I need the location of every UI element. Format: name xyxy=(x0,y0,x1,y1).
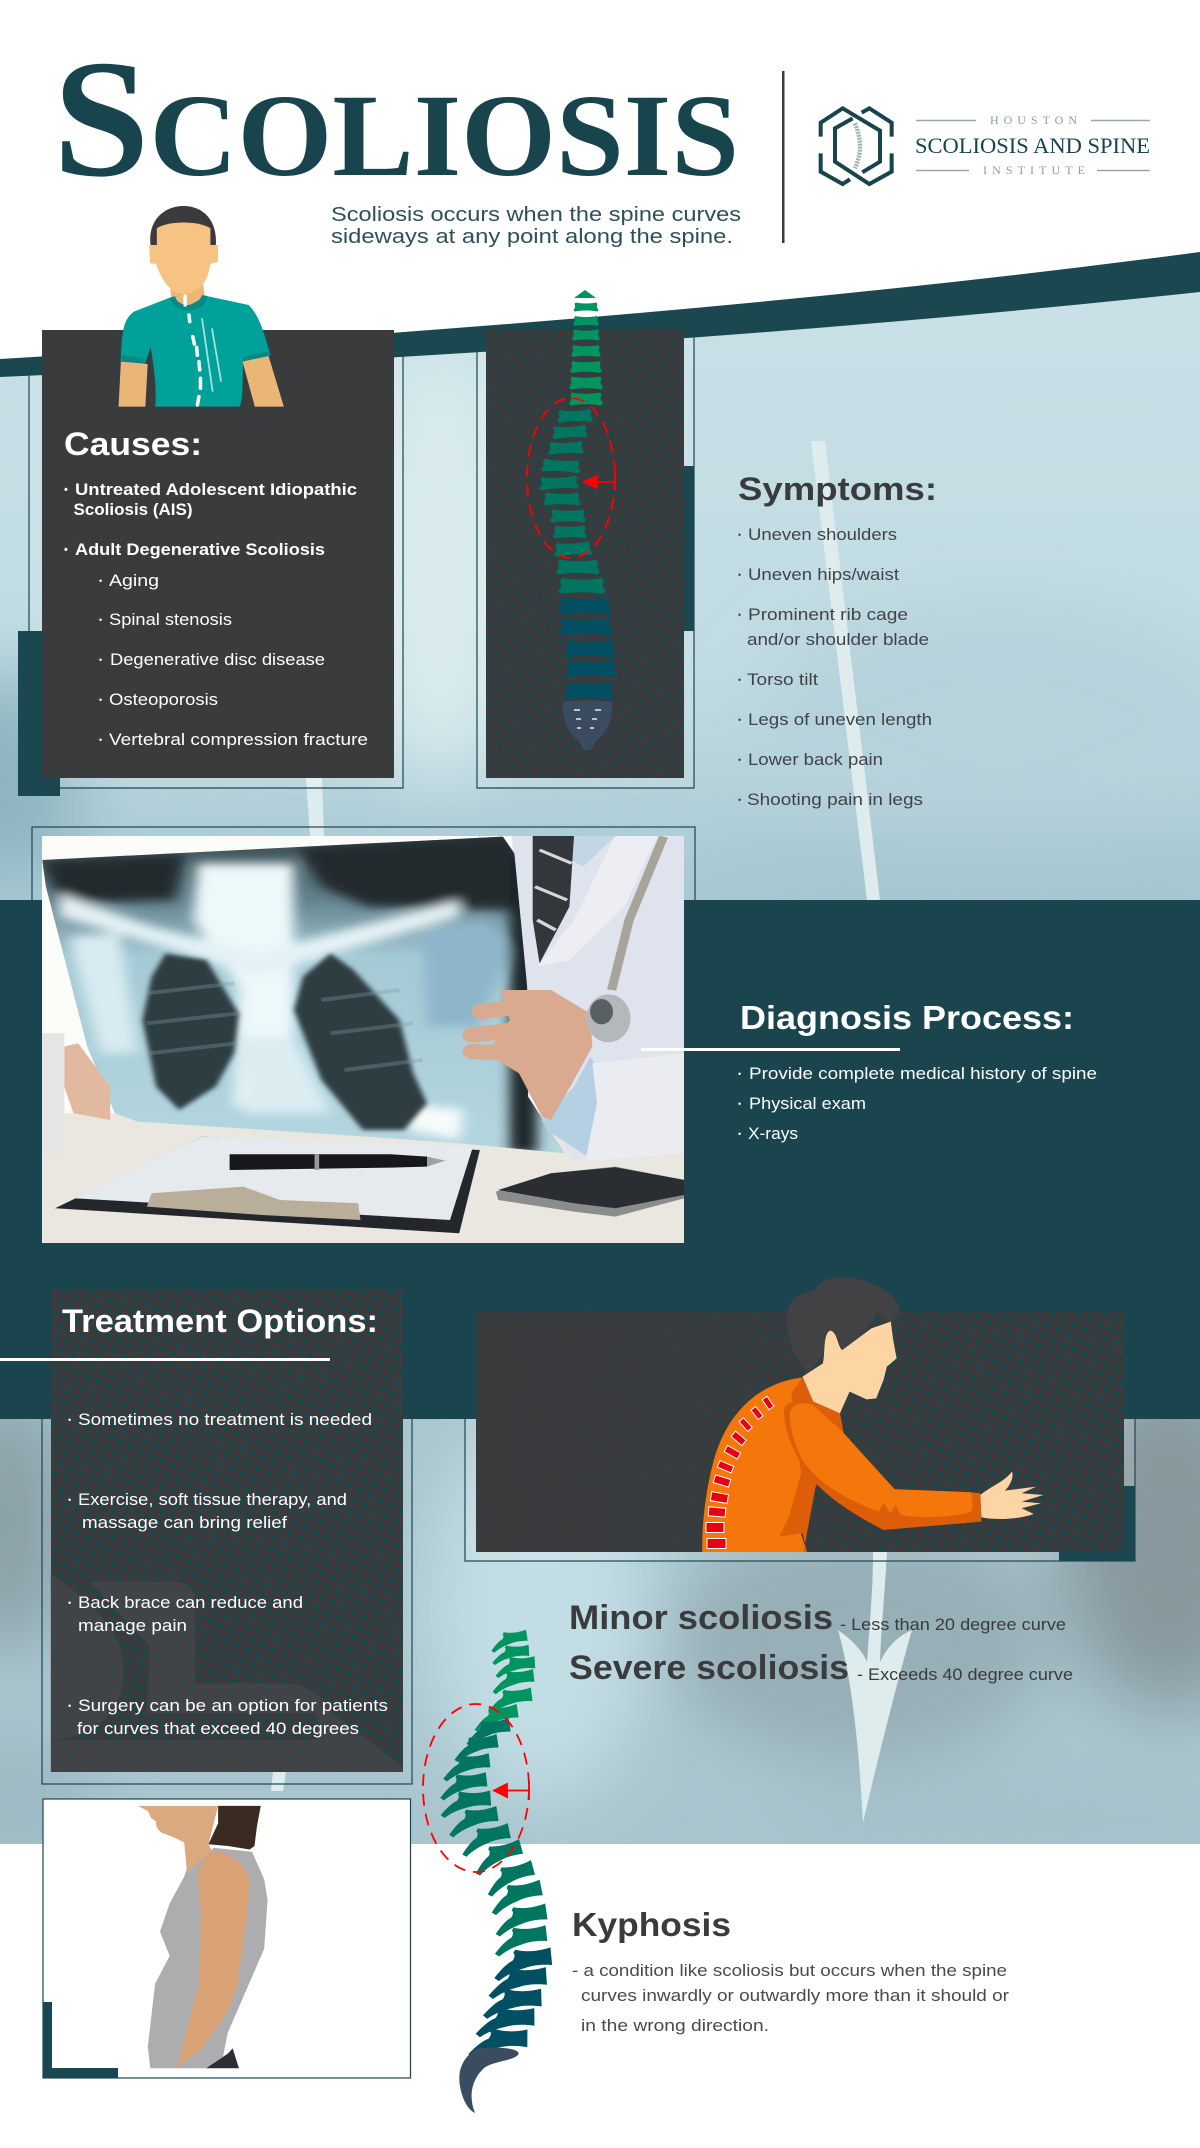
causes list: Untreated Adolescent Idiopathic xyxy=(75,481,357,499)
kyphosis description: curves inwardly or outwardly more than it should or xyxy=(581,1987,1010,2005)
teal accent block: causes xyxy=(18,631,60,796)
photo: woman in profile xyxy=(43,1799,410,2078)
diagnosis list: Provide complete medical history of spine xyxy=(749,1065,1097,1083)
lungs xyxy=(142,953,427,1130)
title: Scoliosis xyxy=(53,26,739,212)
severe scoliosis: Severe scoliosis xyxy=(569,1649,849,1687)
subtitle text block: sideways at any point along the spine. xyxy=(331,225,733,248)
causes list: Osteoporosis xyxy=(109,691,218,709)
causes list: Adult Degenerative Scoliosis xyxy=(75,541,325,559)
causes list: Spinal stenosis xyxy=(109,611,232,629)
doctor left hand xyxy=(64,1043,110,1120)
panel outline: spine xyxy=(477,322,694,788)
photo: doctor holding x-ray xyxy=(42,833,685,1247)
symptoms list: • xyxy=(738,675,741,685)
treatment list: Exercise, soft tissue therapy, and xyxy=(78,1491,347,1509)
treatment list xyxy=(68,1411,388,1738)
logo text: INSTITUTE xyxy=(983,163,1085,177)
treatment list: • xyxy=(68,1415,71,1425)
upper textured background xyxy=(0,292,1200,900)
symptoms list: Legs of uneven length xyxy=(748,711,932,729)
panel outline: photo xyxy=(32,827,695,947)
severe scoliosis xyxy=(569,1649,1073,1687)
lower vertebrae xyxy=(468,1947,553,2061)
heading: kyphosis: Kyphosis xyxy=(572,1906,731,1943)
symptoms list: • xyxy=(738,610,741,620)
table surface xyxy=(42,1113,685,1247)
treatment list: Surgery can be an option for patients xyxy=(78,1697,388,1715)
symptoms list: • xyxy=(738,570,741,580)
symptoms list: • xyxy=(738,755,741,765)
curve highlight xyxy=(423,1704,529,1872)
upper vertebrae xyxy=(473,1630,535,1732)
clipboard xyxy=(55,1137,480,1233)
treatment list: Back brace can reduce and xyxy=(78,1594,303,1612)
kyphosis description: in the wrong direction. xyxy=(581,2017,769,2035)
background arrow graphic xyxy=(271,441,912,1823)
divider line: treatment xyxy=(0,1358,330,1361)
teal section xyxy=(0,900,1200,1419)
treatment list: • xyxy=(68,1598,71,1608)
icon: man with curved spine xyxy=(119,206,284,407)
symptoms list: Prominent rib cage xyxy=(748,606,908,624)
doctor sleeve xyxy=(542,1057,599,1157)
causes list: • xyxy=(64,544,68,556)
heading: symptoms: Symptoms: xyxy=(738,471,937,507)
symptoms list: Uneven hips/waist xyxy=(748,566,899,584)
sacrum xyxy=(459,2048,519,2113)
minor scoliosis: - Less than 20 degree curve xyxy=(840,1615,1066,1634)
diagnosis list: • xyxy=(738,1099,741,1109)
lower textured background xyxy=(0,1419,1200,1844)
icon: logo hexagon xyxy=(821,108,892,184)
causes list: • xyxy=(99,655,102,665)
treatment list: manage pain xyxy=(78,1617,187,1635)
header divider xyxy=(782,71,784,243)
diagnosis process xyxy=(738,999,1097,1143)
panel outline: causes xyxy=(29,345,403,788)
treatment list: • xyxy=(68,1701,71,1711)
treatment list: • xyxy=(68,1495,71,1505)
heading: treatment options: Treatment Options: xyxy=(62,1303,378,1339)
symptoms list: Torso tilt xyxy=(747,671,818,689)
x-ray film xyxy=(42,837,565,1153)
diagnosis list xyxy=(738,1065,1097,1143)
logo text: SCOLIOSIS AND SPINE xyxy=(915,133,1150,158)
causes list: • xyxy=(99,735,102,745)
curve highlight xyxy=(527,398,615,558)
symptoms list: • xyxy=(738,715,741,725)
symptoms xyxy=(738,471,937,809)
subtitle text block: Scoliosis occurs when the spine curves xyxy=(331,203,741,226)
causes list: Vertebral compression fracture xyxy=(109,731,368,749)
teal curved band xyxy=(0,252,1200,377)
treatment list: for curves that exceed 40 degrees xyxy=(77,1720,359,1738)
causes list xyxy=(64,481,368,749)
diagnosis list: X-rays xyxy=(748,1125,798,1143)
causes list: • xyxy=(99,576,102,586)
symptoms list: Shooting pain in legs xyxy=(747,791,923,809)
causes list: Aging xyxy=(109,572,159,590)
illustration: straight and curved spine xyxy=(527,290,617,750)
upper vertebrae xyxy=(569,290,603,406)
causes list: • xyxy=(64,484,68,496)
panel: posture illustration xyxy=(476,1277,1124,1552)
causes list: • xyxy=(99,615,102,625)
kyphosis description xyxy=(572,1962,1010,2035)
diagnosis list: • xyxy=(738,1069,741,1079)
sacrum xyxy=(563,700,612,750)
lower vertebrae xyxy=(558,598,617,699)
diagnosis list: • xyxy=(738,1129,741,1139)
curved vertebrae xyxy=(539,409,606,594)
pen xyxy=(230,1154,427,1170)
diagnosis list: Physical exam xyxy=(749,1095,866,1113)
teal accent block: posture illustration xyxy=(1059,1486,1135,1561)
doctor right hand xyxy=(487,990,592,1120)
heading: causes: Causes: xyxy=(64,426,202,462)
symptoms list: Lower back pain xyxy=(748,751,883,769)
doctor coat xyxy=(512,836,684,1160)
symptoms list xyxy=(738,526,932,809)
water glass xyxy=(42,1033,64,1114)
symptoms list: • xyxy=(738,530,741,540)
minor scoliosis: Minor scoliosis xyxy=(569,1599,833,1637)
kyphosis text xyxy=(572,1906,1010,2035)
severe scoliosis: - Exceeds 40 degree curve xyxy=(857,1665,1073,1684)
minor scoliosis xyxy=(569,1599,1066,1637)
logo xyxy=(821,108,1150,184)
tablet xyxy=(496,1167,684,1217)
panel: spine xyxy=(486,329,684,778)
causes list: Scoliosis (AIS) xyxy=(74,501,192,519)
logo text: HOUSTON xyxy=(990,113,1077,127)
symptoms list: • xyxy=(738,795,741,805)
heading: diagnosis process: Diagnosis Process: xyxy=(740,999,1074,1036)
illustration: kyphosis spine xyxy=(423,1630,553,2113)
curved vertebrae xyxy=(439,1718,549,1957)
symptoms list: Uneven shoulders xyxy=(748,526,897,544)
teal accent block: spine xyxy=(684,466,694,631)
icon: hunched person with curved spine xyxy=(702,1277,1043,1552)
treatment list: Sometimes no treatment is needed xyxy=(78,1411,372,1429)
divider line: diagnosis xyxy=(641,1048,900,1051)
panel outline: treatment xyxy=(42,1300,412,1784)
subtitle text block xyxy=(331,203,741,248)
red spine segments xyxy=(706,1396,774,1548)
logo text xyxy=(915,113,1150,177)
panel: treatment options xyxy=(51,1289,403,1772)
panel outline: posture illustration xyxy=(465,1320,1135,1561)
causes list: • xyxy=(99,695,102,705)
symptoms list: and/or shoulder blade xyxy=(747,631,929,649)
stethoscope xyxy=(612,837,664,990)
scoliosis severity text xyxy=(569,1599,1073,1687)
treatment list: massage can bring relief xyxy=(82,1514,287,1532)
causes list: Degenerative disc disease xyxy=(110,651,325,669)
kyphosis description: - a condition like scoliosis but occurs when the spine xyxy=(572,1962,1007,1980)
panel: causes xyxy=(42,330,394,778)
